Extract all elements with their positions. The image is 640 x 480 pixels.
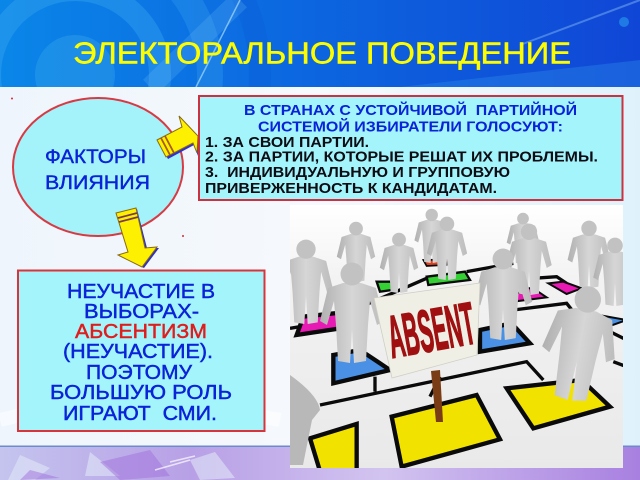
factors text: ВЛИЯНИЯ [45,172,150,194]
absenteeism text: НЕУЧАСТИЕ В [67,281,215,303]
floor chart [290,259,627,477]
bottom band [0,446,640,480]
absenteeism text: ИГРАЮТ СМИ. [63,403,217,425]
absenteeism text: БОЛЬШУЮ РОЛЬ [50,382,232,404]
absenteeism text [50,281,232,425]
panel heading [244,101,577,136]
factors text: ФАКТОРЫ [45,147,146,168]
panel: stable party system [199,96,622,200]
arrow: to lower panel [116,208,159,268]
arrow: to right panel [157,116,200,159]
illustration: absent sign among people: ABSENT [383,290,480,371]
panel heading: СИСТЕМОЙ ИЗБИРАТЕЛИ ГОЛОСУЮТ: [258,118,563,136]
panel: absenteeism [18,270,264,431]
decorative dots [11,98,184,237]
panel: factors ellipse [13,98,183,236]
absenteeism text: ВЫБОРАХ- [84,301,199,323]
panel list [205,134,598,197]
title: ЭЛЕКТОРАЛЬНОЕ ПОВЕДЕНИЕ [73,36,571,70]
panel list: 1. ЗА СВОИ ПАРТИИ. [205,134,369,151]
illustration: absent sign among people [279,205,637,477]
panel heading: В СТРАНАХ С УСТОЙЧИВОЙ ПАРТИЙНОЙ [244,101,577,119]
factors text [45,147,150,194]
panel list: ПРИВЕРЖЕННОСТЬ К КАНДИДАТАМ. [205,180,497,197]
sign post [431,370,443,422]
header band [0,0,640,87]
absenteeism text: (НЕУЧАСТИЕ). [63,341,213,363]
people [279,209,637,465]
panel list: 3. ИНДИВИДУАЛЬНУЮ И ГРУППОВУЮ [205,164,510,181]
absenteeism text: АБСЕНТИЗМ [75,321,207,343]
absenteeism text: ПОЭТОМУ [86,362,192,384]
panel list: 2. ЗА ПАРТИИ, КОТОРЫЕ РЕШАТ ИХ ПРОБЛЕМЫ. [205,148,598,166]
sign [374,283,480,378]
